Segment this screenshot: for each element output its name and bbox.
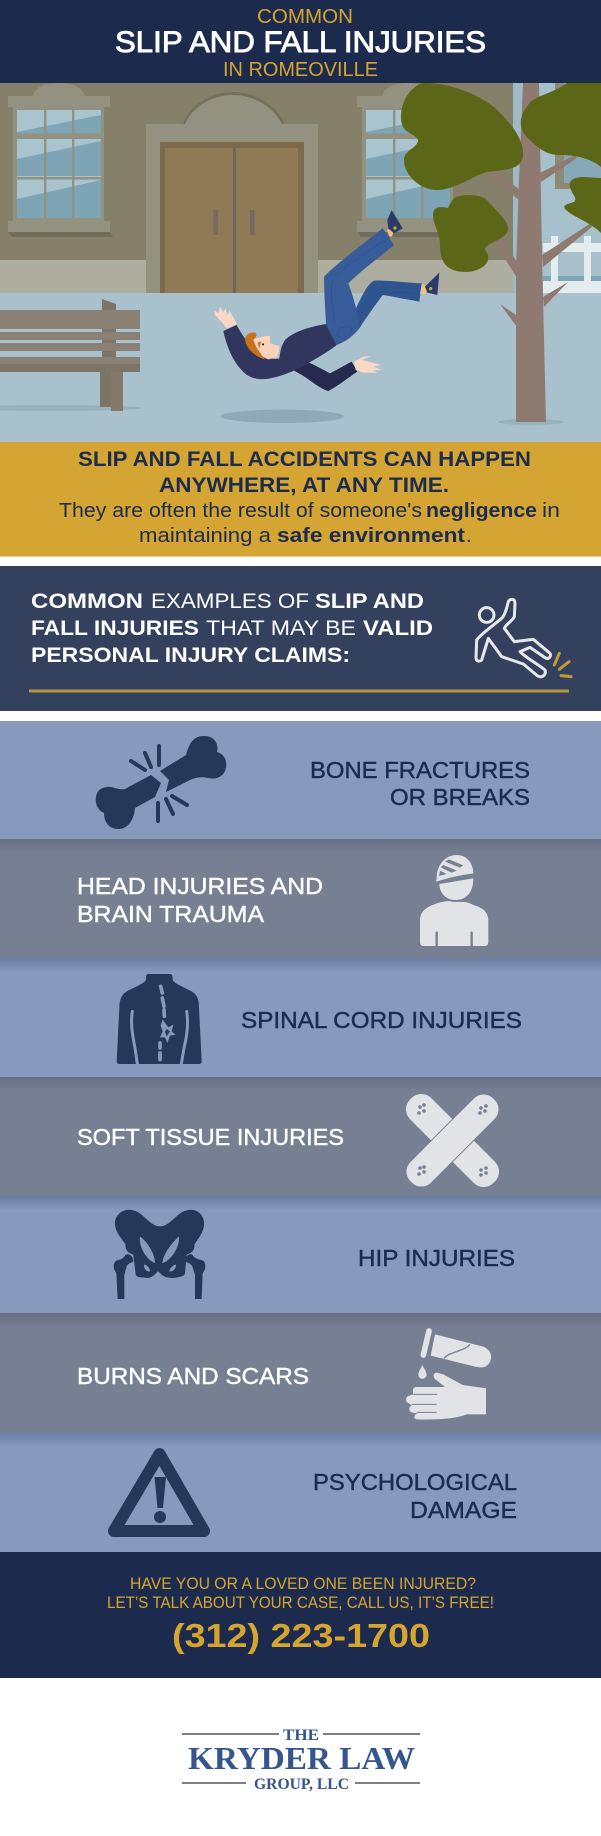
label: PSYCHOLOGICAL — [313, 1469, 517, 1495]
illustration: man slipping outside a building — [0, 83, 601, 442]
label — [310, 757, 530, 810]
label — [313, 1469, 517, 1523]
title: slip and fall injuries: SLIP AND FALL INJURIES — [115, 26, 486, 59]
callout body — [59, 500, 560, 547]
label: BONE FRACTURES — [310, 757, 530, 783]
fence — [543, 236, 601, 293]
panel heading: PERSONAL INJURY CLAIMS: — [31, 644, 350, 667]
callout heading: ANYWHERE, AT ANY TIME. — [159, 474, 449, 497]
callout body: They are often the result of someone's — [59, 500, 422, 522]
heading: common: COMMON — [257, 6, 353, 28]
icon: falling figure — [476, 599, 571, 677]
row: hip — [0, 1196, 601, 1313]
icon: warning triangle — [114, 1454, 204, 1531]
row: burns — [0, 1313, 601, 1432]
floor — [0, 293, 601, 442]
label: OR BREAKS — [390, 784, 530, 810]
window left — [8, 83, 113, 237]
logo: the kryder law group: KRYDER LAW — [188, 1740, 415, 1776]
row: soft tissue — [0, 1077, 601, 1196]
panel heading: FALL INJURIES — [31, 617, 199, 640]
icon: broken bone — [96, 736, 226, 829]
panel heading: COMMON — [31, 590, 143, 613]
callout body: in — [542, 500, 560, 522]
label: BRAIN TRAUMA — [77, 901, 265, 927]
panel heading — [31, 590, 433, 667]
row: bone fractures — [0, 721, 601, 839]
icon: crossed bandages — [400, 1088, 505, 1193]
label: BURNS AND SCARS — [77, 1363, 309, 1389]
callout heading — [78, 448, 531, 497]
icon: bandaged head — [420, 855, 488, 946]
call to action text: LET’S TALK ABOUT YOUR CASE, CALL US, IT’S FREE! — [107, 1593, 494, 1612]
row: spinal cord — [0, 958, 601, 1077]
heading: in romeoville: IN ROMEOVILLE — [223, 59, 378, 81]
header banner — [0, 0, 601, 83]
panel heading: VALID — [363, 617, 433, 640]
panel heading: SLIP AND — [315, 590, 424, 613]
panel heading: EXAMPLES OF — [151, 590, 309, 613]
window right — [357, 83, 462, 237]
panel heading: THAT MAY BE — [206, 617, 356, 640]
callout body: safe environment — [277, 525, 465, 547]
label: HEAD INJURIES AND — [77, 873, 323, 899]
icon: spine back — [117, 974, 202, 1064]
callout body: negligence — [426, 500, 537, 522]
bench — [0, 299, 142, 411]
falling man — [214, 210, 439, 423]
label — [77, 873, 323, 927]
label: DAMAGE — [410, 1497, 517, 1523]
logo: the kryder law group: THE — [283, 1727, 319, 1744]
door surround — [146, 92, 318, 294]
callout body: maintaining a — [139, 525, 272, 547]
tree — [401, 83, 601, 425]
phone number: (312) 223-1700 — [172, 1617, 430, 1654]
label: SOFT TISSUE INJURIES — [77, 1124, 344, 1150]
icon: pelvis — [114, 1210, 205, 1299]
logo: the kryder law group — [182, 1727, 420, 1793]
call to action text: HAVE YOU OR A LOVED ONE BEEN INJURED? — [130, 1574, 476, 1593]
callout heading: SLIP AND FALL ACCIDENTS CAN HAPPEN — [78, 448, 531, 471]
label: HIP INJURIES — [358, 1245, 515, 1271]
panel: common examples — [0, 566, 601, 711]
call to action text — [107, 1574, 494, 1612]
icon: chemical on hand — [406, 1331, 491, 1419]
gold callout — [0, 442, 601, 556]
logo: the kryder law group: GROUP, LLC — [254, 1776, 349, 1793]
label: SPINAL CORD INJURIES — [241, 1007, 522, 1033]
row: head injuries — [0, 839, 601, 958]
callout body: . — [466, 525, 472, 547]
footer call to action — [0, 1552, 601, 1678]
row: psychological — [0, 1432, 601, 1552]
